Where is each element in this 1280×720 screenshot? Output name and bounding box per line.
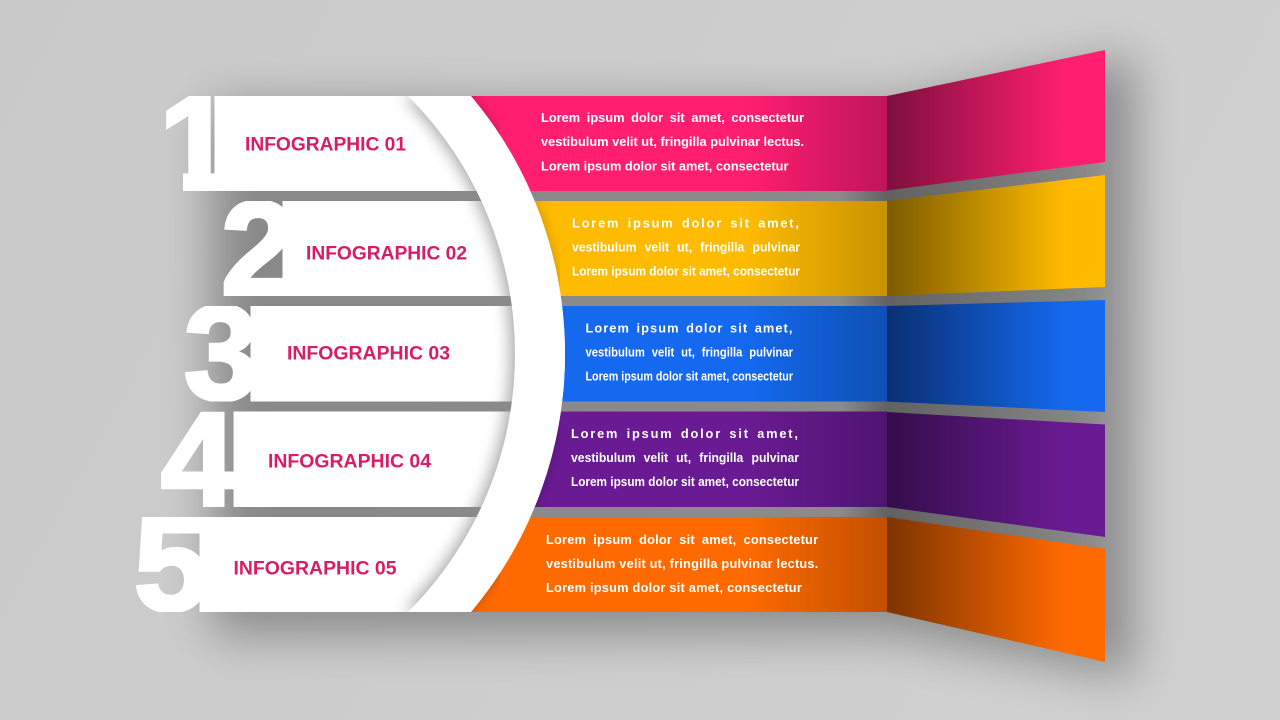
text block 3: vestibulum velit ut, fringilla pulvinar: [586, 344, 793, 360]
text block 5: Lorem ipsum dolor sit amet, consectetur: [546, 532, 818, 547]
text block 3: Lorem ipsum dolor sit amet,: [586, 320, 794, 336]
colour band 5: orange: [400, 517, 1105, 662]
heading 04: INFOGRAPHIC 04: [268, 450, 431, 472]
text block 5: vestibulum velit ut, fringilla pulvinar lectus.: [546, 556, 818, 571]
digit 3: 3: [184, 279, 259, 428]
text block 3: Lorem ipsum dolor sit amet, consectetur: [586, 368, 793, 384]
text block 1: [541, 110, 804, 174]
infographic canvas: [136, 40, 1156, 692]
text block 4: Lorem ipsum dolor sit amet, consectetur: [571, 474, 799, 489]
text block 5: Lorem ipsum dolor sit amet, consectetur: [546, 580, 802, 595]
digit 2: 2: [221, 175, 296, 324]
colour band 4: purple: [400, 412, 1105, 537]
white arc ring: [408, 96, 565, 612]
colour band 3: blue: [400, 300, 1105, 412]
text block 2: [572, 216, 801, 278]
text block 4: Lorem ipsum dolor sit amet,: [571, 426, 800, 441]
text block 1: vestibulum velit ut, fringilla pulvinar lectus.: [541, 134, 804, 149]
text block 5: [546, 532, 818, 595]
digit 4: 4: [161, 386, 236, 535]
text block 4: [571, 426, 800, 489]
heading 01: INFOGRAPHIC 01: [245, 134, 406, 156]
text block 2: Lorem ipsum dolor sit amet, consectetur: [572, 264, 800, 278]
text block 2: vestibulum velit ut, fringilla pulvinar: [572, 240, 800, 254]
digit 5: 5: [134, 490, 209, 639]
digit 1: 1: [159, 69, 234, 218]
drop shadow: [212, 56, 1134, 678]
heading 05: INFOGRAPHIC 05: [234, 558, 397, 580]
colour band 1: pink: [400, 50, 1105, 191]
white label panels: [200, 96, 582, 612]
heading 03: INFOGRAPHIC 03: [287, 342, 450, 364]
text block 2: Lorem ipsum dolor sit amet,: [572, 216, 801, 230]
heading 02: INFOGRAPHIC 02: [306, 242, 467, 264]
arc shadow: [404, 96, 561, 612]
text block 3: [586, 320, 794, 384]
text block 1: Lorem ipsum dolor sit amet, consectetur: [541, 110, 804, 125]
colour band 2: yellow: [400, 175, 1105, 296]
right gap shading: [840, 150, 1105, 570]
text block 4: vestibulum velit ut, fringilla pulvinar: [571, 450, 799, 465]
text block 1: Lorem ipsum dolor sit amet, consectetur: [541, 158, 788, 174]
